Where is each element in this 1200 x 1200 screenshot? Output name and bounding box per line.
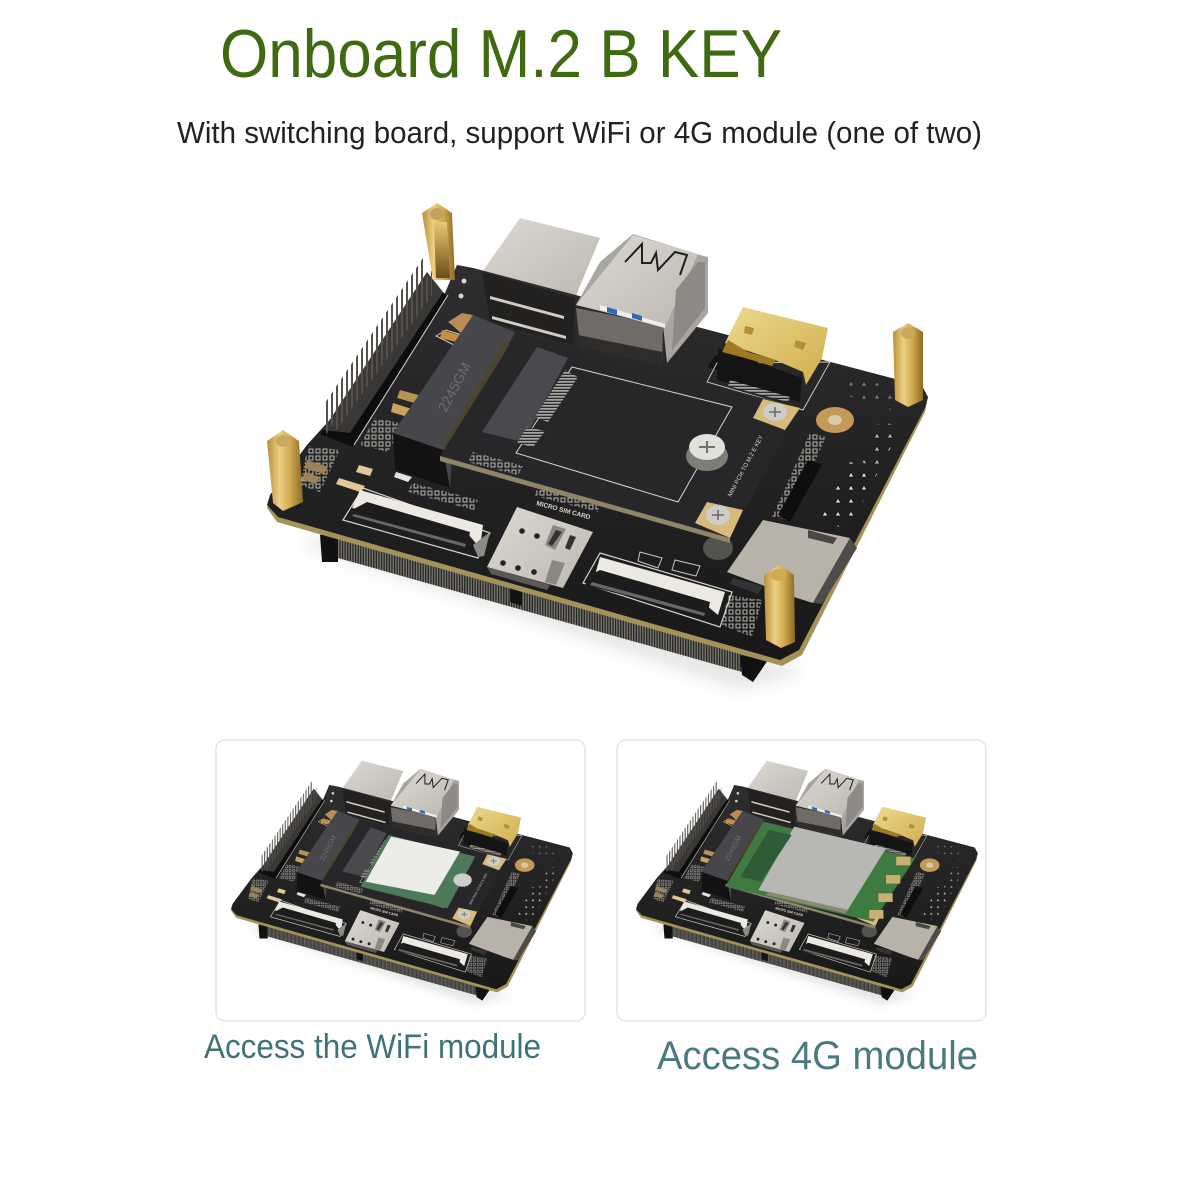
caption: 4G: Access 4G module <box>657 1034 978 1078</box>
standoff: front left <box>267 430 303 511</box>
subtitle: With switching board, support WiFi or 4G module (one of two) <box>177 115 982 150</box>
panel: 4G module <box>617 740 986 1021</box>
board: WiFi <box>231 761 573 1005</box>
standoff: back right <box>893 323 923 407</box>
4G module <box>725 822 915 922</box>
panel: WiFi module <box>216 740 585 1021</box>
board: 4G <box>636 761 978 1005</box>
title: Onboard M.2 B KEY <box>220 16 782 92</box>
WiFi module <box>361 835 475 908</box>
standoff: front <box>764 565 795 648</box>
standoff: back left <box>422 203 455 280</box>
caption: WiFi: Access the WiFi module <box>204 1028 541 1066</box>
main board photo <box>267 203 928 690</box>
center screw <box>686 434 728 471</box>
